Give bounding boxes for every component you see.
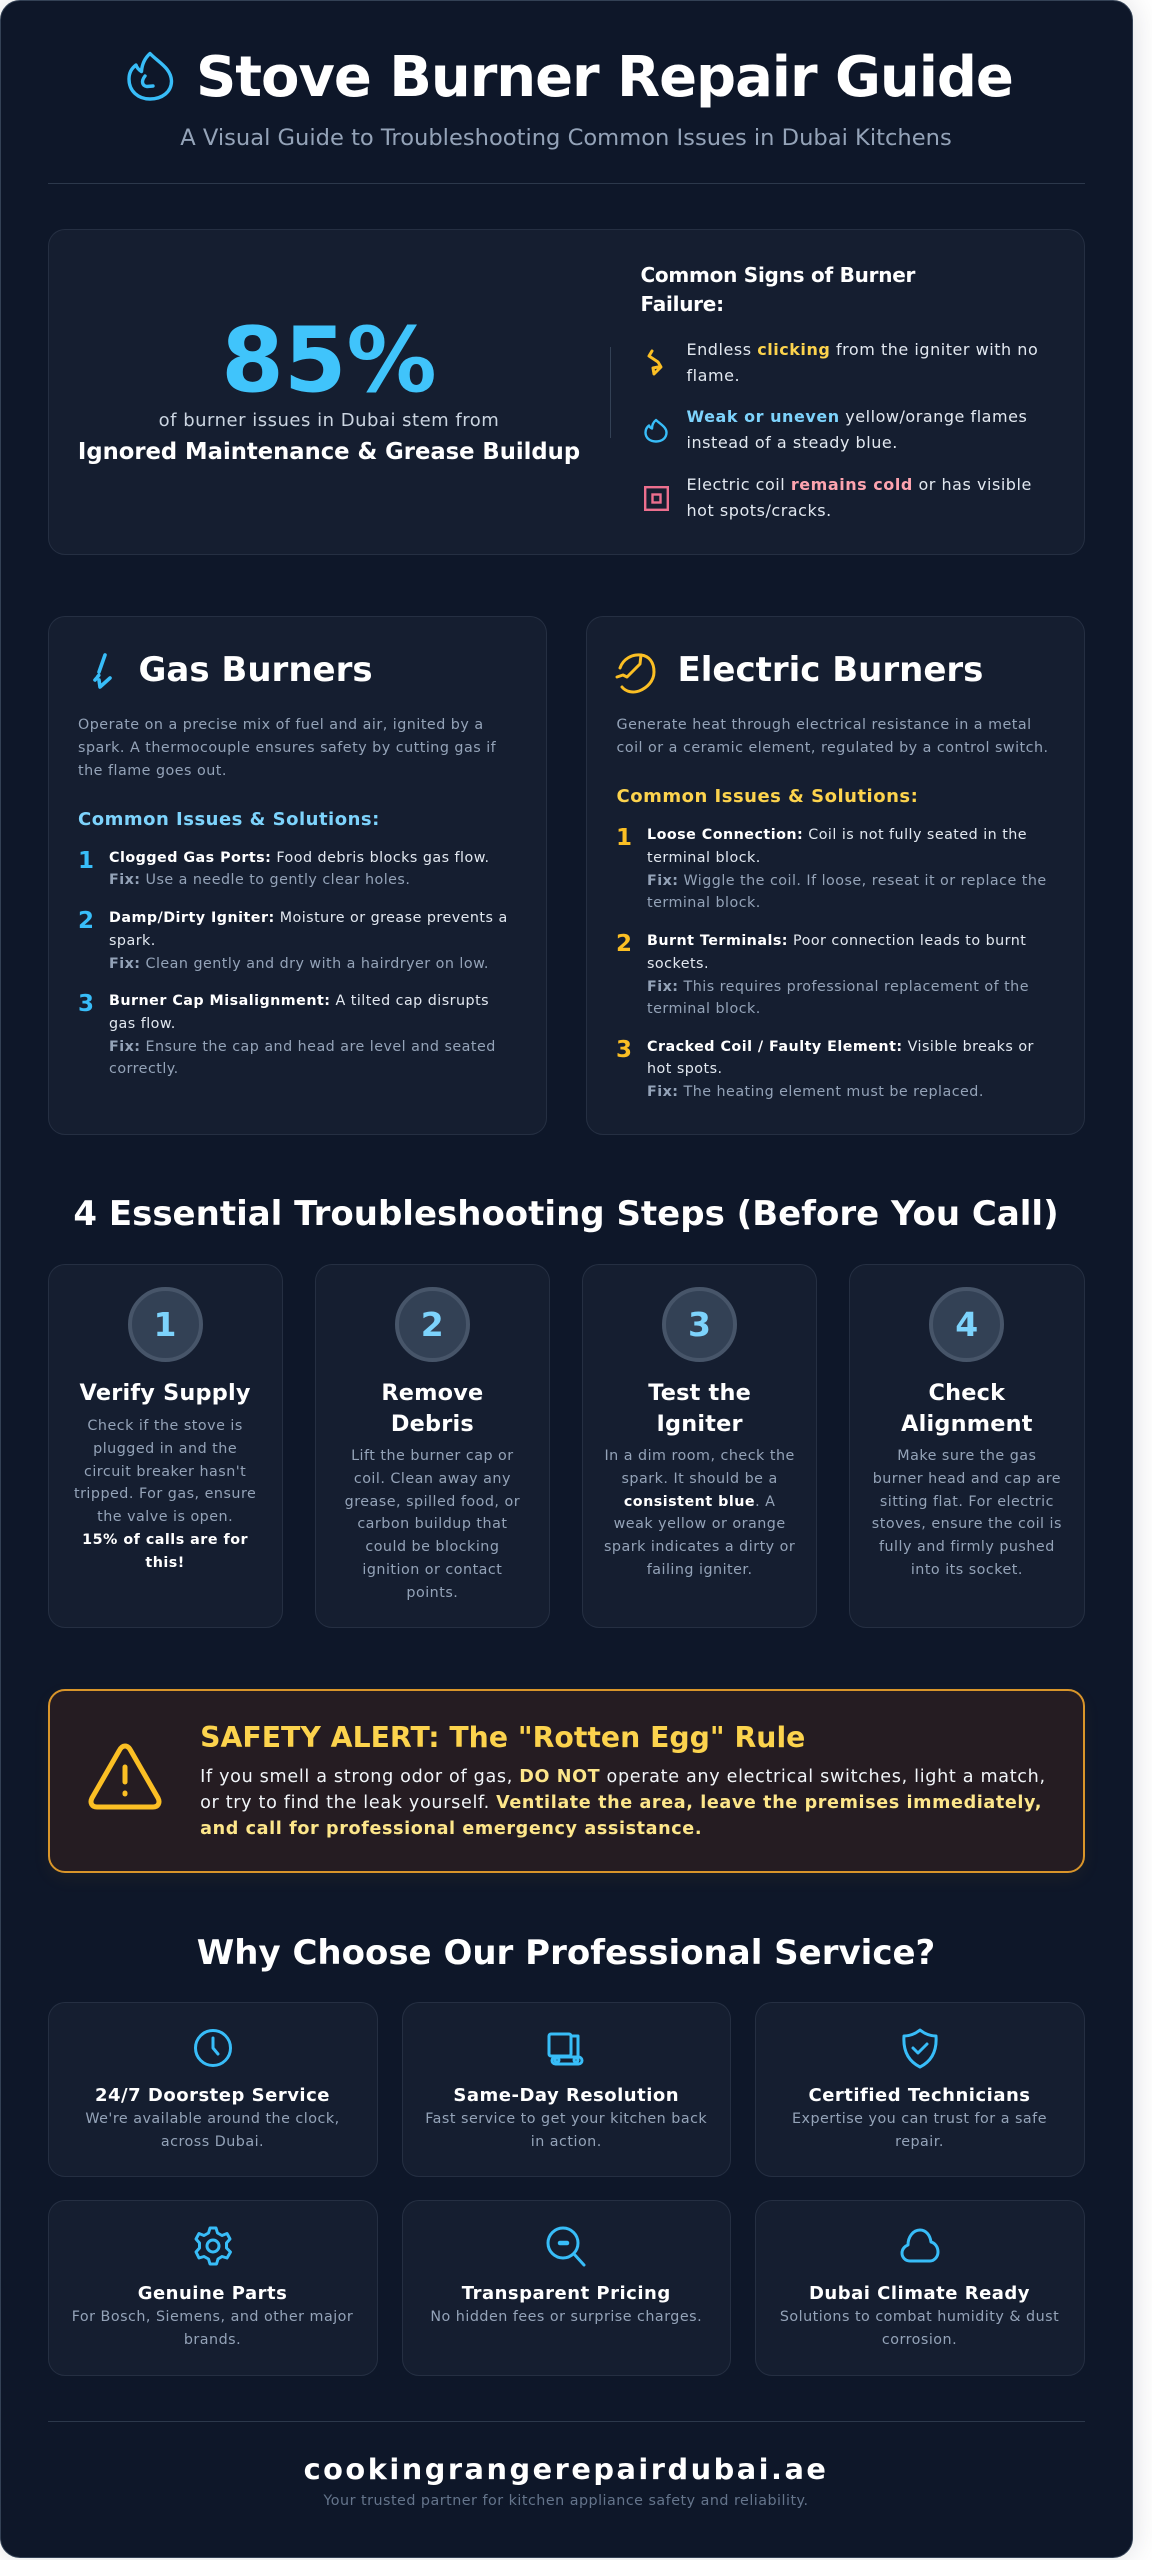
step text: Make sure the gas — [897, 1448, 1036, 1464]
step number: 4 — [955, 1305, 978, 1344]
electric issue 2: Fix: This requires professional replacement of the — [647, 979, 1029, 995]
panel: key statistic and failure signs — [48, 228, 1084, 554]
step text — [872, 1448, 1062, 1578]
panel: electric burners: 2 — [616, 931, 632, 957]
signs heading: Failure: — [640, 292, 724, 316]
service card: certified — [754, 2002, 1084, 2177]
step text: points. — [406, 1585, 458, 1601]
gas issues heading: Common Issues & Solutions: — [78, 808, 380, 830]
step text — [604, 1448, 795, 1578]
step number — [128, 1287, 202, 1362]
step text: grease, spilled food, or — [345, 1494, 520, 1510]
electric issue 1: Loose Connection: Coil is not fully seated in the — [647, 827, 1027, 843]
electric description — [616, 717, 1049, 756]
service title: Transparent Pricing — [462, 2282, 671, 2304]
safety alert panel — [48, 1688, 1084, 1872]
step card 3 — [582, 1264, 817, 1628]
big statistic: 85% — [221, 308, 437, 412]
gas issue 1 — [78, 848, 490, 888]
panel: electric burners: 1 — [616, 825, 632, 851]
electric description: Generate heat through electrical resistance in a metal — [616, 717, 1032, 733]
panel: gas burners: 2 — [78, 908, 94, 934]
step text: sitting flat. For electric — [880, 1494, 1054, 1510]
step text: the valve is open. — [97, 1509, 233, 1525]
gas issue 2: Fix: Clean gently and dry with a hairdryer on low. — [109, 956, 489, 972]
electric issue 3: Cracked Coil / Faulty Element: Visible breaks or — [647, 1038, 1034, 1054]
service title: 24/7 Doorstep Service — [95, 2084, 330, 2106]
service text: repair. — [895, 2134, 944, 2150]
icon: magnifier — [546, 2226, 586, 2267]
services heading: Why Choose Our Professional Service? — [197, 1932, 935, 1972]
step title: Test the — [648, 1380, 751, 1406]
electric issues heading: Common Issues & Solutions: — [616, 786, 918, 806]
gas description: the flame goes out. — [78, 763, 227, 779]
service card: climate — [754, 2200, 1084, 2376]
sign text: cold coil: Electric coil remains cold or has visible — [686, 474, 1032, 494]
gas issue 3: gas flow. — [109, 1016, 176, 1032]
service text: across Dubai. — [161, 2134, 264, 2150]
icon: warning triangle — [88, 1744, 162, 1810]
electric issue 2: sockets. — [647, 956, 709, 972]
step number — [662, 1287, 737, 1362]
step title: Debris — [391, 1411, 474, 1437]
footer tagline: Your trusted partner for kitchen appliance safety and reliability. — [323, 2492, 808, 2508]
electric issue 3 — [616, 1036, 1034, 1100]
step text: tripped. For gas, ensure — [74, 1486, 256, 1502]
subtitle: A Visual Guide to Troubleshooting Common Issues in Dubai Kitchens — [180, 124, 952, 150]
gas issue 1: Clogged Gas Ports: Food debris blocks gas flow. — [109, 850, 490, 866]
service text: Solutions to combat humidity & dust — [780, 2309, 1059, 2325]
footer website: cookingrangerepairdubai.ae — [304, 2452, 828, 2486]
header title row — [127, 44, 1013, 110]
step text — [74, 1418, 256, 1571]
sign text: weak flame — [686, 406, 1027, 452]
statistic emphasis: Ignored Maintenance & Grease Buildup — [78, 438, 580, 464]
step number — [395, 1287, 470, 1362]
step title — [901, 1380, 1033, 1437]
step text: Lift the burner cap or — [351, 1448, 514, 1464]
step title: Remove — [381, 1380, 483, 1406]
alert text: and call for professional emergency assistance. — [200, 1819, 702, 1839]
step text: could be blocking — [365, 1539, 499, 1555]
electric issue 2: terminal block. — [647, 1001, 761, 1017]
step text: fully and firmly pushed — [879, 1539, 1055, 1555]
step text: this! — [145, 1555, 185, 1571]
alert text: or try to find the leak yourself. Ventilate the area, leave the premises immediately, — [200, 1793, 1042, 1813]
step text: 15% of calls are for — [82, 1532, 248, 1548]
service text — [85, 2111, 340, 2150]
electric issue 2 — [616, 931, 1029, 1017]
service title: Same-Day Resolution — [453, 2084, 679, 2106]
electric issue 3: hot spots. — [647, 1061, 723, 1077]
step text: weak yellow or orange — [614, 1516, 786, 1532]
signs heading: Common Signs of Burner — [640, 262, 915, 286]
icon: gas igniter — [93, 653, 112, 689]
sign text: clicking: flame. — [686, 366, 740, 385]
icon: shield — [902, 2028, 938, 2068]
step text: burner head and cap are — [873, 1471, 1061, 1487]
electric heading: Electric Burners — [678, 650, 983, 690]
step number: 3 — [688, 1305, 711, 1344]
sign text: clicking: Endless clicking from the igniter with no — [686, 340, 1038, 358]
service text: Fast service to get your kitchen back — [425, 2111, 707, 2127]
service text — [792, 2111, 1047, 2150]
step number: 2 — [421, 1305, 444, 1344]
gas issue 3: correctly. — [109, 1061, 179, 1077]
service text — [780, 2309, 1059, 2348]
service card: parts — [48, 2200, 378, 2376]
alert text — [200, 1766, 1046, 1839]
statistic caption: of burner issues in Dubai stem from — [159, 410, 499, 430]
step text: into its socket. — [911, 1562, 1023, 1578]
electric issue 3: Fix: The heating element must be replaced. — [647, 1084, 984, 1100]
title: Stove Burner Repair Guide — [196, 44, 1013, 110]
step text — [345, 1448, 520, 1601]
panel: gas burners — [48, 616, 546, 1134]
step title — [381, 1380, 483, 1437]
gas issue 2: Damp/Dirty Igniter: Moisture or grease prevents a — [109, 910, 508, 926]
electric issue 1 — [616, 825, 1047, 911]
gas heading: Gas Burners — [138, 650, 373, 690]
service text: No hidden fees or surprise charges. — [430, 2309, 702, 2325]
icon: flame — [127, 52, 174, 101]
electric issue 1: terminal block. — [647, 850, 761, 866]
icon: electric element — [616, 653, 656, 694]
gas issue 1: Fix: Use a needle to gently clear holes. — [109, 872, 410, 888]
step card 2 — [315, 1264, 550, 1628]
gas description: spark. A thermocouple ensures safety by cutting gas if — [78, 740, 496, 756]
step text: plugged in and the — [93, 1441, 237, 1457]
step text: stoves, ensure the coil is — [872, 1516, 1062, 1532]
sign text: cold coil — [686, 474, 1032, 520]
service text — [72, 2309, 353, 2348]
gas description: Operate on a precise mix of fuel and air, ignited by a — [78, 717, 484, 733]
electric description: coil or a ceramic element, regulated by a control switch. — [616, 740, 1049, 756]
icon: cloud — [900, 2228, 940, 2262]
service text: Expertise you can trust for a safe — [792, 2111, 1047, 2127]
step title — [648, 1380, 751, 1437]
step text: failing igniter. — [647, 1562, 753, 1578]
step text: carbon buildup that — [357, 1516, 507, 1532]
service title: Dubai Climate Ready — [809, 2282, 1030, 2304]
gas issue 3: Fix: Ensure the cap and head are level and seated — [109, 1039, 496, 1055]
icon: clock — [194, 2029, 232, 2067]
electric issue 1: Fix: Wiggle the coil. If loose, reseat it or replace the — [647, 873, 1047, 889]
step text: coil. Clean away any — [354, 1471, 511, 1487]
step number: 1 — [154, 1305, 176, 1344]
step title: Igniter — [656, 1411, 743, 1437]
sign text: cold coil: hot spots/cracks. — [686, 501, 832, 520]
step title: Check — [928, 1380, 1005, 1406]
gas description — [78, 717, 496, 779]
gas issue 3 — [78, 991, 496, 1077]
step card 4 — [849, 1264, 1084, 1628]
electric issue 2: Burnt Terminals: Poor connection leads to burnt — [647, 933, 1026, 949]
panel: gas burners: 1 — [78, 848, 94, 874]
steps heading: 4 Essential Troubleshooting Steps (Before You Call) — [73, 1194, 1059, 1234]
service title: Genuine Parts — [138, 2282, 287, 2304]
panel: gas burners: 3 — [78, 991, 94, 1017]
panel: electric burners — [586, 616, 1084, 1134]
step text: spark indicates a dirty or — [604, 1539, 795, 1555]
electric issue 1: terminal block. — [647, 895, 761, 911]
step title: Alignment — [901, 1411, 1033, 1437]
icon: electric coil — [644, 486, 669, 511]
sign text: weak flame: instead of a steady blue. — [686, 433, 898, 452]
alert heading: SAFETY ALERT: The "Rotten Egg" Rule — [200, 1720, 805, 1754]
service card: pricing — [402, 2200, 731, 2376]
step number — [929, 1287, 1004, 1362]
gas issue 3: Burner Cap Misalignment: A tilted cap disrupts — [109, 993, 489, 1009]
alert text: If you smell a strong odor of gas, DO NOT operate any electrical switches, light a match, — [200, 1766, 1046, 1786]
step text: spark. It should be a — [621, 1471, 778, 1487]
service text: We're available around the clock, — [85, 2111, 340, 2127]
panel: electric burners: 3 — [616, 1036, 632, 1062]
icon: spark — [647, 349, 662, 376]
icon: gear — [194, 2226, 232, 2266]
step text: Check if the stove is — [87, 1418, 243, 1434]
service text: in action. — [531, 2134, 602, 2150]
icon: weak flame — [644, 418, 668, 443]
gas issue 2 — [78, 908, 508, 972]
signs heading — [640, 262, 916, 316]
service text: corrosion. — [882, 2332, 957, 2348]
icon: truck — [548, 2032, 584, 2066]
service text: brands. — [184, 2332, 241, 2348]
service card: same-day — [402, 2002, 731, 2177]
step text: In a dim room, check the — [604, 1448, 795, 1464]
service text — [425, 2111, 707, 2150]
gas issue 2: spark. — [109, 933, 156, 949]
step title: Verify Supply — [80, 1380, 251, 1406]
step card 1 — [48, 1264, 283, 1628]
sign text: clicking — [686, 340, 1038, 385]
service text: For Bosch, Siemens, and other major — [72, 2309, 353, 2325]
step text: consistent blue. A — [624, 1494, 775, 1510]
service card: doorstep — [48, 2002, 378, 2177]
service title: Certified Technicians — [808, 2084, 1030, 2106]
step text: circuit breaker hasn't — [84, 1464, 246, 1480]
sign text: weak flame: Weak or uneven yellow/orange flames — [686, 406, 1027, 426]
step text: ignition or contact — [362, 1562, 502, 1578]
